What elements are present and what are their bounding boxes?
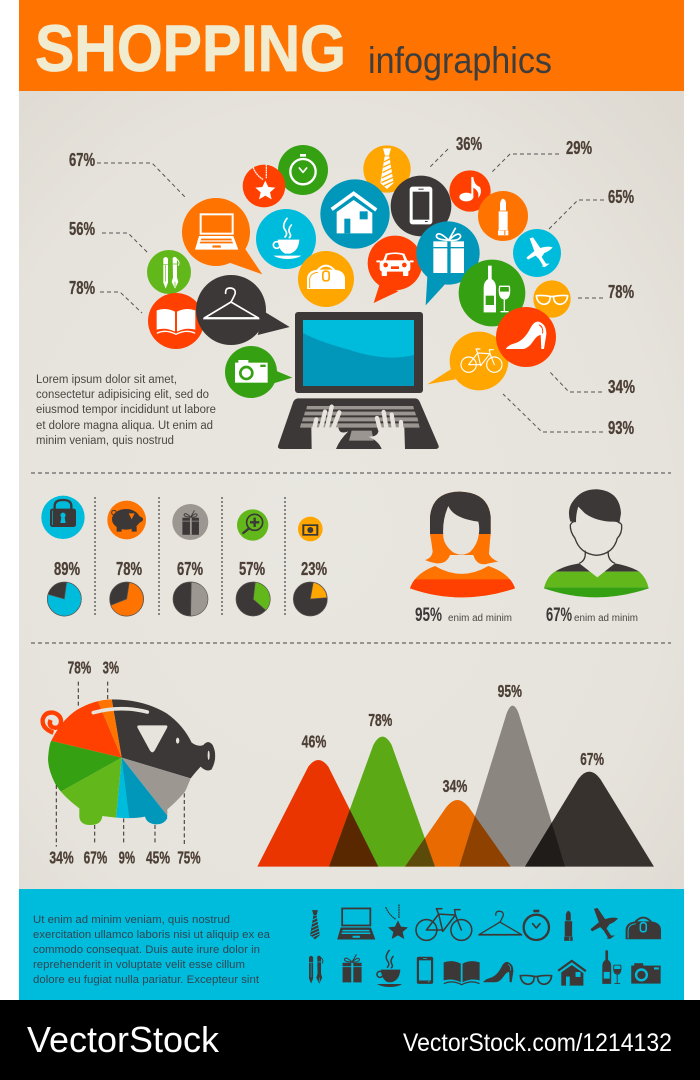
stat percentages: 89% <box>54 559 80 579</box>
stat percentages: 67% <box>177 559 203 579</box>
circle: airplane <box>513 229 561 277</box>
cluster percentage labels: 34% <box>608 377 635 397</box>
header band <box>19 0 684 91</box>
stat percentages <box>54 559 327 579</box>
mountain labels: 34% <box>443 776 467 796</box>
footer text: reprehenderit in voluptate velit esse cillum <box>33 959 245 971</box>
pig labels: 9% <box>119 847 135 867</box>
footer icon set <box>309 905 661 987</box>
cluster percentage labels: 78% <box>608 282 634 302</box>
circle: smartphone <box>391 176 451 236</box>
watermark bar <box>0 1000 700 1080</box>
pig labels <box>49 657 201 867</box>
watermark url: VectorStock.com/1214132 <box>403 1029 672 1057</box>
circle: house <box>320 179 390 249</box>
peak: 95% <box>459 706 565 867</box>
cluster percentage labels: 29% <box>566 138 592 158</box>
stat icon: banknote <box>298 517 323 541</box>
stat percentages: 57% <box>239 559 265 579</box>
woman caption <box>415 605 512 626</box>
circle: lipstick <box>478 191 528 241</box>
bubble: hanger <box>196 275 290 345</box>
title: SHOPPING <box>35 11 346 85</box>
man caption <box>546 605 638 626</box>
cluster percentage labels: 56% <box>69 219 95 239</box>
pig labels: 67% <box>84 847 107 867</box>
mountain chart <box>257 681 654 867</box>
footer text: exercitation ullamco laboris nisi ut aliquip ex ea <box>33 929 271 941</box>
piggy bank pie chart <box>40 661 216 864</box>
footer text: Ut enim ad minim veniam, quis nostrud <box>33 914 230 926</box>
mountain labels: 46% <box>302 732 326 752</box>
mountain labels: 95% <box>498 681 522 701</box>
watermark logo: VectorStock <box>27 1019 220 1060</box>
icon cluster <box>147 145 571 398</box>
circle: clock <box>278 145 328 195</box>
bubble: car <box>368 236 422 303</box>
stat icon: magnifier <box>237 509 268 541</box>
intro text: et dolore magna aliqua. Ut enim ad <box>36 420 213 432</box>
stat row <box>41 496 327 616</box>
mountain labels: 67% <box>580 749 604 769</box>
bubble: gift <box>416 221 480 305</box>
bubble: bicycle <box>427 332 508 390</box>
man caption: enim ad minim <box>574 613 638 624</box>
subtitle: infographics <box>368 40 552 81</box>
cluster percentage labels: 93% <box>608 418 634 438</box>
pig labels: 45% <box>146 847 170 867</box>
footer text: dolore eu fugiat nulla pariatur. Excepteur sint <box>33 974 259 986</box>
cluster percentage labels: 65% <box>608 187 634 207</box>
pig details <box>93 709 210 760</box>
stat icon: lock <box>41 496 85 539</box>
circle: tie <box>363 145 411 193</box>
circle: star necklace <box>243 165 285 207</box>
pig labels: 34% <box>49 847 74 867</box>
footer text: commodo consequat. Duis aute irure dolor in <box>33 944 260 956</box>
peak: 46% <box>257 760 378 867</box>
pig labels: 3% <box>103 657 119 677</box>
man avatar <box>544 489 649 597</box>
peak: 34% <box>405 800 511 867</box>
stat percentages: 78% <box>116 559 142 579</box>
bubble: laptop <box>182 198 262 274</box>
woman avatar <box>410 492 515 597</box>
circle: glasses <box>533 280 571 318</box>
circle: wine <box>459 260 525 326</box>
circle: book <box>148 293 204 349</box>
circle: coffee cup <box>256 209 316 269</box>
intro text <box>36 374 216 447</box>
circle: pencils <box>147 250 191 294</box>
pig labels: 75% <box>177 847 201 867</box>
circle: handbag <box>298 251 354 307</box>
pig slices <box>48 699 216 825</box>
cluster percentage labels <box>69 134 635 438</box>
beige background panel <box>19 90 684 890</box>
footer text <box>33 914 271 986</box>
footer band <box>19 889 684 1000</box>
bubble: camera <box>225 346 292 398</box>
pig labels: 78% <box>68 657 91 677</box>
tail <box>43 713 61 733</box>
man caption: 67% <box>546 605 572 626</box>
cluster percentage labels: 67% <box>69 150 95 170</box>
leader lines <box>97 149 604 432</box>
cluster percentage labels: 78% <box>69 278 95 298</box>
intro text: Lorem ipsum dolor sit amet, <box>36 374 177 386</box>
intro text: minim veniam, quis nostrud <box>36 435 174 447</box>
intro text: eiusmod tempor incididunt ut labore <box>36 404 216 416</box>
woman caption: 95% <box>415 605 442 626</box>
peak: 78% <box>329 737 435 867</box>
intro text: consectetur adipisicing elit, sed do <box>36 389 209 401</box>
stat icon: piggy bank <box>107 501 146 539</box>
circle: music note <box>449 170 491 212</box>
peak: 67% <box>525 772 654 867</box>
circle: high-heel shoe <box>496 307 556 367</box>
pie charts <box>47 582 327 616</box>
mountain labels: 78% <box>368 710 392 730</box>
woman caption: enim ad minim <box>448 613 512 624</box>
people <box>410 489 649 626</box>
stat icon: gift box <box>172 504 208 540</box>
mountain labels <box>302 681 604 796</box>
stat percentages: 23% <box>301 559 327 579</box>
pig leader lines <box>56 682 184 847</box>
cluster percentage labels: 36% <box>456 134 482 154</box>
laptop with typing hands <box>278 312 439 449</box>
